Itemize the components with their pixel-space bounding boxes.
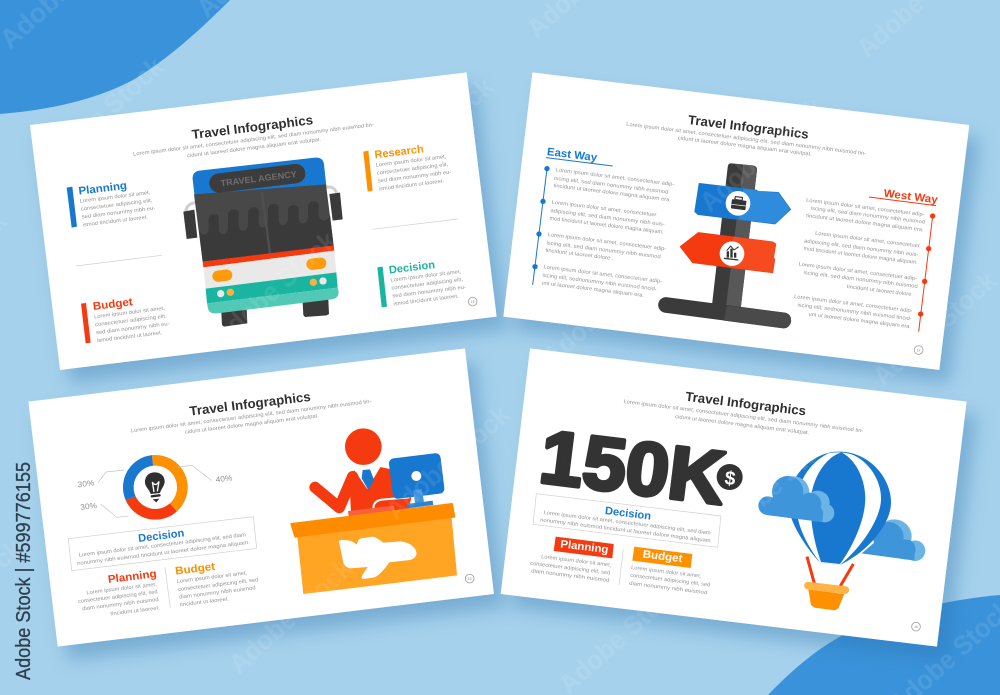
column: West Way: unt ut laoreet dolore magna aliquam era. bbox=[808, 312, 911, 330]
panel: reception desk slide bbox=[28, 348, 494, 647]
section: Budget: Budget bbox=[92, 296, 134, 313]
big number: 150K: 150K bbox=[536, 414, 730, 520]
icon: growth chart bbox=[724, 246, 739, 260]
watermark: Adobe Stock repeated: Adobe Stock bbox=[364, 71, 500, 197]
section: Budget: diam nonummy nibh euismod bbox=[179, 585, 256, 601]
page number: 14 bbox=[914, 346, 923, 354]
text: signpost slide intro: cidunt ut laoreet dolore magna aliquam erat volutpat. bbox=[677, 135, 812, 158]
column: East Way bbox=[532, 146, 675, 299]
balloon envelope bbox=[788, 452, 891, 565]
section: Research: Lorem ipsum dolor sit amet, bbox=[376, 154, 447, 169]
section: Decision: Lorem ipsum dolor sit amet, bbox=[390, 269, 461, 284]
column: East Way: Lorem ipsum dolor sit amet, consectetuer adip- bbox=[547, 232, 667, 253]
text: desk slide intro: Lorem ipsum dolor sit amet, consectetuer adipiscing elit, sed diam nonummy nibh euismod tin- bbox=[131, 399, 372, 434]
watermark: Adobe Stock repeated: Adobe Stock bbox=[50, 379, 186, 505]
section: Planning bbox=[78, 568, 160, 617]
section: Planning: sed diam nonummy nibh eu- bbox=[81, 206, 156, 221]
decorative blob: top left bbox=[0, 0, 230, 114]
column: East Way: East Way bbox=[546, 146, 599, 164]
section: Budget: ismod tincidunt ut laoreet. bbox=[97, 330, 163, 344]
column: West Way: West Way bbox=[883, 188, 939, 206]
sign: red arrow left bbox=[680, 233, 776, 273]
text: signpost slide intro: Lorem ipsum dolor sit amet, consectetuer adipiscing elit, sed diam nonummy nibh euismod tin- bbox=[626, 122, 867, 157]
column: West Way: Lorem ipsum dolor sit amet, consectetuer adip- bbox=[798, 262, 917, 282]
icon: agent at desk bbox=[291, 428, 457, 594]
section: Decision: sed diam nonummy nibh eu- bbox=[392, 285, 467, 300]
section: Planning: consectetuer adipiscing elit, sed bbox=[78, 589, 158, 605]
section: Budget: Budget bbox=[642, 548, 683, 565]
section: Budget: Lorem ipsum dolor sit amet, bbox=[631, 565, 702, 580]
column: West Way: mod tincidunt ut laoreet dolore magna aliquam. bbox=[803, 246, 918, 266]
section: Budget: diam nonummy nibh euismod bbox=[629, 581, 708, 596]
section: Planning: diam nonummy nibh euismod bbox=[531, 568, 610, 584]
section: Planning: consectetuer adipiscing elit, sed bbox=[530, 561, 611, 576]
section: Planning: Lorem ipsum dolor sit amet, bbox=[80, 190, 151, 205]
column: West Way: tincidunt ut laoreet dolore magna aliquam era. bbox=[806, 213, 924, 233]
section: Budget bbox=[629, 547, 711, 596]
section: Budget: Lorem ipsum dolor sit amet, bbox=[94, 306, 165, 320]
page number: 16: 16 bbox=[914, 625, 918, 629]
column: West Way: tincidunt ut laoreet dolore . bbox=[846, 284, 915, 298]
column: West Way: iscing elit, sed diam nonummy nibh euismod bbox=[810, 206, 925, 226]
heading: bus slide title: Travel Infographics bbox=[191, 112, 314, 142]
callout: Decision: Decision bbox=[604, 505, 652, 523]
icon: briefcase bbox=[731, 197, 747, 210]
page number: 15 bbox=[465, 574, 474, 583]
section: Planning: tincidunt ut laoreet. bbox=[110, 605, 160, 617]
section: Budget bbox=[81, 296, 171, 344]
text: balloon slide intro: Lorem ipsum dolor sit amet, consectetuer adipiscing elit, sed diam nonummy nibh euismod tin- bbox=[623, 399, 864, 434]
labels: percentages: 30% bbox=[80, 501, 97, 512]
section: Planning: Planning bbox=[107, 568, 157, 586]
labels: percentages bbox=[77, 465, 233, 517]
watermark: Adobe Stock repeated: Adobe Stock bbox=[710, 419, 846, 545]
section: Planning: ismod tincidunt ut laoreet. bbox=[82, 215, 148, 228]
watermark: Adobe Stock repeated: Adobe Stock bbox=[537, 245, 673, 371]
text: bus slide intro: Lorem ipsum dolor sit amet, consectetuer adipiscing elit, sed diam nonummy nibh euismod tin- bbox=[133, 122, 374, 158]
heading: desk slide title: Travel Infographics bbox=[189, 389, 311, 419]
panel: bus slide bbox=[30, 72, 497, 370]
heading: balloon slide title: Travel Infographics bbox=[685, 389, 807, 418]
section: Planning bbox=[67, 180, 157, 228]
section: Planning bbox=[530, 537, 614, 584]
text: balloon slide intro: cidunt ut laoreet dolore magna aliquam erat volutpat. bbox=[675, 414, 809, 436]
column: East Way: iscing elit, sed diam nonummy nibh euismod bbox=[554, 176, 669, 196]
page number: 14: 14 bbox=[917, 348, 921, 352]
section: Budget bbox=[175, 561, 259, 608]
column: West Way: adipiscing elit, sed diam nonummy nibh euis- bbox=[804, 238, 919, 258]
column: East Way: Lorem ipsum dolor sit amet, consectetuer adip- bbox=[555, 167, 675, 188]
column: West Way: Lorem ipsum dolor sit amet, consectetuer adip- bbox=[794, 294, 913, 315]
page number: 15 bbox=[468, 297, 477, 306]
section: Planning: Lorem ipsum dolor sit amet, bbox=[86, 582, 157, 596]
section: Decision: Decision bbox=[388, 259, 436, 277]
column: West Way: Lorem ipsum dolor sit amet, consectetuer adip- bbox=[806, 198, 925, 218]
page number: 16 bbox=[912, 622, 920, 631]
column: East Way: Lorem ipsum dolor sit amet, consectetuer bbox=[551, 200, 657, 219]
callout: Decision: Lorem ipsum dolor sit amet, consectetuer adipiscing elit, sed diam bbox=[79, 532, 247, 559]
page number: 15: 15 bbox=[471, 300, 475, 304]
basket bbox=[808, 586, 845, 610]
column: East Way: iscing elit, sed diam nonummy nibh euismod bbox=[546, 240, 661, 260]
icon: bus bbox=[183, 158, 343, 327]
section: Budget: Budget bbox=[175, 561, 216, 578]
watermark: Adobe Stock repeated: Adobe Stock bbox=[380, 399, 516, 525]
column: East Way: iscing elit, sednonummy nibh euismod tincid- bbox=[542, 273, 657, 293]
section: Budget: consectetuer adipiscing elit, sed bbox=[178, 577, 259, 593]
callout: Decision: nonummy nibh euismod tincidunt ut laoreet dolore magna aliquam. bbox=[77, 540, 250, 567]
watermark: Adobe Stock repeated: Adobe Stock bbox=[34, 51, 170, 177]
labels: percentages: 30% bbox=[77, 478, 95, 489]
section: Budget: sed diam nonummy nibh eu- bbox=[96, 321, 170, 336]
icon: plane bbox=[339, 537, 417, 579]
column: West Way: Lorem ipsum dolor sit amet, consectetuer bbox=[815, 231, 920, 250]
watermark: Adobe Stock repeated: Adobe Stock bbox=[694, 91, 830, 217]
callout: Decision bbox=[533, 494, 721, 547]
callout: Decision: Decision bbox=[138, 527, 185, 545]
section: Budget: Lorem ipsum dolor sit amet, bbox=[177, 570, 247, 585]
labels: percentages: 40% bbox=[215, 473, 233, 484]
section: Decision bbox=[377, 259, 468, 307]
credit: vertical stock id: Adobe Stock | #599776155 bbox=[13, 462, 35, 680]
section: Research bbox=[363, 143, 453, 192]
column: West Way bbox=[794, 188, 939, 332]
icon: signpost bbox=[666, 163, 791, 328]
watermark: Adobe Stock repeated: Adobe Stock bbox=[223, 553, 359, 679]
sign: blue arrow right bbox=[695, 184, 790, 224]
column: East Way: mod tincidunt ut laoreet dolore magna aliquam. bbox=[549, 216, 664, 236]
section: Research: ismod tincidunt ut laoreet. bbox=[378, 179, 444, 192]
section: Budget: consectetuer adipiscing elit, sed bbox=[630, 573, 711, 588]
watermark: Adobe Stock repeated: Adobe Stock bbox=[207, 225, 343, 351]
section: Research: sed diam nonummy nibh eu- bbox=[377, 170, 452, 185]
icon: front cloud bbox=[758, 476, 834, 522]
text: bus slide intro: cidunt ut laoreet dolore magna aliquam erat volutpat. bbox=[187, 137, 322, 159]
panel: balloon slide bbox=[501, 348, 967, 647]
column: East Way: unt ut laoreet dolore magna aliquam era. bbox=[541, 280, 644, 299]
section: Budget: tincidunt ut laoreet. bbox=[180, 596, 230, 608]
section: Planning: consectetuer adipiscing elit, bbox=[80, 198, 153, 213]
column: West Way: iscing elit, sednonummy nibh euismod tincid- bbox=[797, 302, 912, 322]
section: Research: Research bbox=[374, 143, 425, 161]
icon: bus: TRAVEL AGENCY bbox=[220, 169, 297, 188]
section: Planning: diam nonummy nibh euismod bbox=[82, 597, 159, 612]
callout: Decision: Lorem ipsum dolor sit amet, consectetuer adipiscing elit, sed diam bbox=[543, 510, 711, 537]
icon: light bulb bbox=[145, 472, 165, 502]
section: Decision: ismod tincidunt ut laoreet. bbox=[393, 294, 459, 307]
icon: dollar badge bbox=[717, 464, 743, 490]
icon: hot air balloon with clouds bbox=[758, 452, 925, 610]
column: West Way: iscing elit, sed diam nonummy nibh euismod bbox=[803, 270, 918, 290]
section: Planning: Planning bbox=[78, 180, 128, 198]
section: Research: consectetuer adipiscing elit, bbox=[376, 162, 449, 177]
section: Budget: consectetuer adipiscing elit, bbox=[95, 314, 167, 328]
column: East Way: tincidunt ut laoreet dolore . bbox=[545, 248, 614, 262]
column: East Way: Lorem ipsum dolor sit amet, consectetuer adip- bbox=[543, 264, 662, 285]
section: Planning: Lorem ipsum dolor sit amet, bbox=[541, 554, 612, 569]
panel: signpost slide bbox=[503, 72, 969, 370]
decorative blob: bottom right bbox=[768, 595, 1000, 695]
section: Planning: Planning bbox=[560, 538, 609, 556]
column: East Way: tincidunt ut laoreet dolore magna aliquam era. bbox=[553, 183, 671, 203]
callout: Decision bbox=[68, 517, 257, 571]
column: East Way: adipiscing elit, sed diam nonummy nibh euis- bbox=[550, 208, 665, 228]
text: desk slide intro: cidunt ut laoreet dolore magna aliquam erat volutpat. bbox=[185, 413, 319, 436]
callout: Decision: nonummy nibh euismod tincidunt ut laoreet dolore magna aliquam. bbox=[540, 517, 713, 544]
icon: rear cloud bbox=[862, 519, 925, 561]
section: Decision: consectetuer adipiscing elit, bbox=[391, 277, 463, 292]
chart: donut bbox=[128, 460, 182, 514]
icon: dollar badge: $ bbox=[723, 468, 737, 490]
heading: signpost slide title: Travel Infographics bbox=[687, 112, 810, 142]
page number: 15: 15 bbox=[468, 577, 472, 581]
